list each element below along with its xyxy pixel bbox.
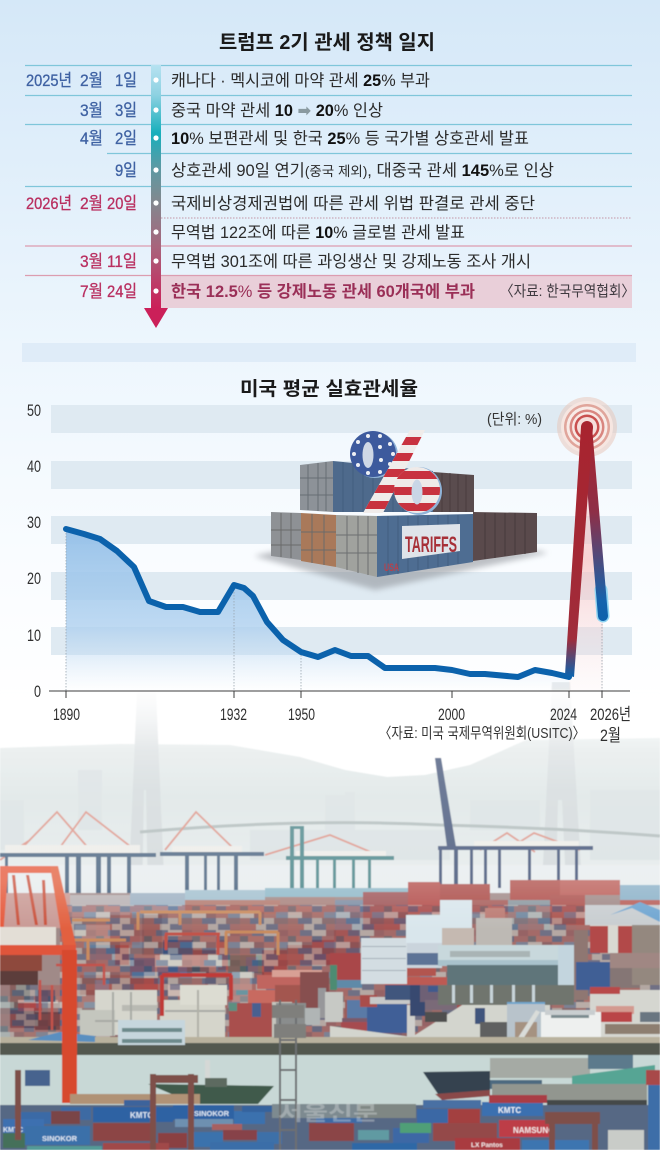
right dark container [473, 512, 537, 561]
foreground left ship [70, 1060, 274, 1104]
left low containers [0, 985, 96, 1040]
chart: effective tariff rate [27, 397, 632, 745]
source: KITA: 〈자료: 한국무역협회〉 [500, 283, 635, 300]
light tower [280, 1000, 296, 1150]
mid yard containers [75, 915, 359, 1025]
y axis labels: 20 [27, 569, 41, 588]
illustration: tariff containers: TARIFFS [405, 532, 457, 557]
foreground hanging container [25, 1070, 50, 1086]
x axis labels: 2026년 [590, 705, 631, 724]
dates 2026: 2월 [80, 194, 103, 213]
dates 2026: 11일 [107, 252, 137, 271]
bridge deck [140, 823, 660, 836]
watermark: 서울신문 [278, 1102, 378, 1125]
shadow [254, 551, 548, 590]
y axis labels [27, 401, 41, 701]
timeline arrow [144, 65, 168, 328]
buildings [361, 900, 574, 1005]
x axis [49, 690, 630, 692]
dates 2025 [26, 71, 137, 180]
percent top circle [350, 431, 398, 478]
dock machinery [15, 1070, 600, 1150]
bottom left containers [271, 512, 301, 560]
foreground right tanker [423, 1055, 655, 1109]
dates 2025: 2월 [80, 71, 103, 90]
mid stacks [229, 970, 329, 1038]
x axis labels: 1950 [288, 705, 315, 724]
event texts [171, 71, 554, 301]
area fills [66, 529, 569, 691]
mountains [0, 738, 660, 900]
container brand labels: KMTC [498, 1106, 521, 1115]
percent bottom circle [394, 467, 442, 515]
panel: policy timeline [25, 65, 635, 328]
light tower head [272, 1005, 306, 1038]
right bridge tower [542, 682, 582, 885]
x axis labels: 2000 [438, 705, 465, 724]
dates 2025: 2025년 [26, 71, 72, 90]
orange yard gantries [72, 912, 278, 960]
title: timeline: 트럼프 2기 관세 정책 일지 [219, 31, 435, 54]
x axis labels: 2024 [550, 705, 577, 724]
dates 2025: 4월 [80, 129, 103, 148]
white ship superstructure [510, 1010, 601, 1062]
end marker halo [601, 590, 603, 616]
water [0, 1055, 660, 1105]
event texts: 무역법 301조에 따른 과잉생산 및 강제노동 조사 개시 [171, 252, 531, 271]
container brand labels: NAMSUNG [513, 1126, 554, 1135]
cranes [0, 852, 264, 903]
x axis labels: 1932 [220, 705, 247, 724]
illustration: tariff containers [254, 428, 548, 590]
yard base [0, 893, 660, 1043]
red spike falling [587, 427, 603, 616]
blue tariff line [66, 529, 569, 677]
dates 2025: 3일 [115, 101, 137, 120]
x axis labels [53, 705, 631, 745]
percent slash [363, 430, 425, 513]
dates 2026: 2026년 [26, 194, 72, 213]
dates 2025: 2일 [115, 129, 137, 148]
x axis labels: 1890 [53, 705, 80, 724]
y axis labels: 30 [27, 513, 41, 532]
dates 2025: 9일 [115, 161, 137, 180]
yard container texture [60, 905, 660, 1040]
orange foreground crane [0, 866, 77, 1103]
highlight row [161, 276, 632, 308]
title: chart: 미국 평균 실효관세율 [240, 378, 418, 400]
far city blocks [0, 770, 660, 860]
source: USITC: 〈자료: 미국 국제무역위원회(USITC)〉 [379, 725, 585, 742]
unit label: (단위: %) [487, 411, 542, 428]
divider band [22, 343, 636, 362]
photo: container port [0, 682, 660, 1150]
event texts: 10% 보편관세 및 한국 25% 등 국가별 상호관세 발표 [171, 129, 529, 148]
event texts: 국제비상경제권법에 따른 관세 위법 판결로 관세 중단 [171, 194, 535, 213]
haze overlay [0, 690, 660, 930]
container brand labels: KMTC [3, 1127, 23, 1134]
dates 2026: 7월 [80, 282, 103, 301]
dates 2026: 3월 [80, 252, 103, 271]
container brand labels [3, 1106, 554, 1149]
dates 2025: 3월 [80, 101, 103, 120]
event texts: 중국 마약 관세 10 ➡ 20% 인상 [171, 101, 383, 120]
dates 2025: 1일 [115, 71, 137, 90]
timeline dots [153, 77, 159, 294]
water behind [0, 865, 660, 900]
red gantries [162, 975, 232, 1016]
left bridge tower [128, 692, 165, 900]
foreground containers [0, 1070, 660, 1150]
dates 2026: 24일 [107, 282, 137, 301]
top stack [433, 472, 474, 512]
dates 2026: 20일 [107, 194, 137, 213]
event texts: 무역법 122조에 따른 10% 글로벌 관세 발표 [171, 223, 465, 242]
crane booms [0, 812, 580, 860]
event texts: 상호관세 90일 연기(중국 제외), 대중국 관세 145%로 인상 [171, 161, 554, 180]
pulse rings [557, 397, 617, 457]
y axis labels: 40 [27, 457, 41, 476]
container brand labels: LX Pantos [471, 1142, 503, 1149]
event texts: 캐나다 · 멕시코에 마약 관세 25% 부과 [171, 71, 430, 90]
tariffs label [402, 524, 460, 559]
y axis labels: 0 [34, 682, 41, 701]
container brand labels: SINOKOR [42, 1134, 78, 1143]
white containers [80, 985, 227, 1037]
right yard [507, 902, 660, 1040]
right mid ground [325, 953, 468, 1038]
red spike rising [565, 427, 593, 677]
container brand labels: SINOKOR [194, 1109, 230, 1118]
center container [377, 514, 473, 577]
container brand labels: KMTC [130, 1111, 153, 1120]
dates 2026 [26, 194, 137, 301]
far yard containers [0, 880, 660, 930]
usa label: USA [384, 562, 399, 574]
row divider lines [25, 66, 632, 276]
guide lines [66, 530, 602, 691]
chart bands [51, 405, 632, 655]
x axis labels: 2월 [600, 726, 621, 745]
y axis labels: 50 [27, 401, 41, 420]
y axis labels: 10 [27, 626, 41, 645]
quay [0, 1020, 660, 1055]
event texts: 한국 12.5% 등 강제노동 관세 60개국에 부과 [171, 282, 475, 301]
ground road [330, 1000, 550, 1042]
